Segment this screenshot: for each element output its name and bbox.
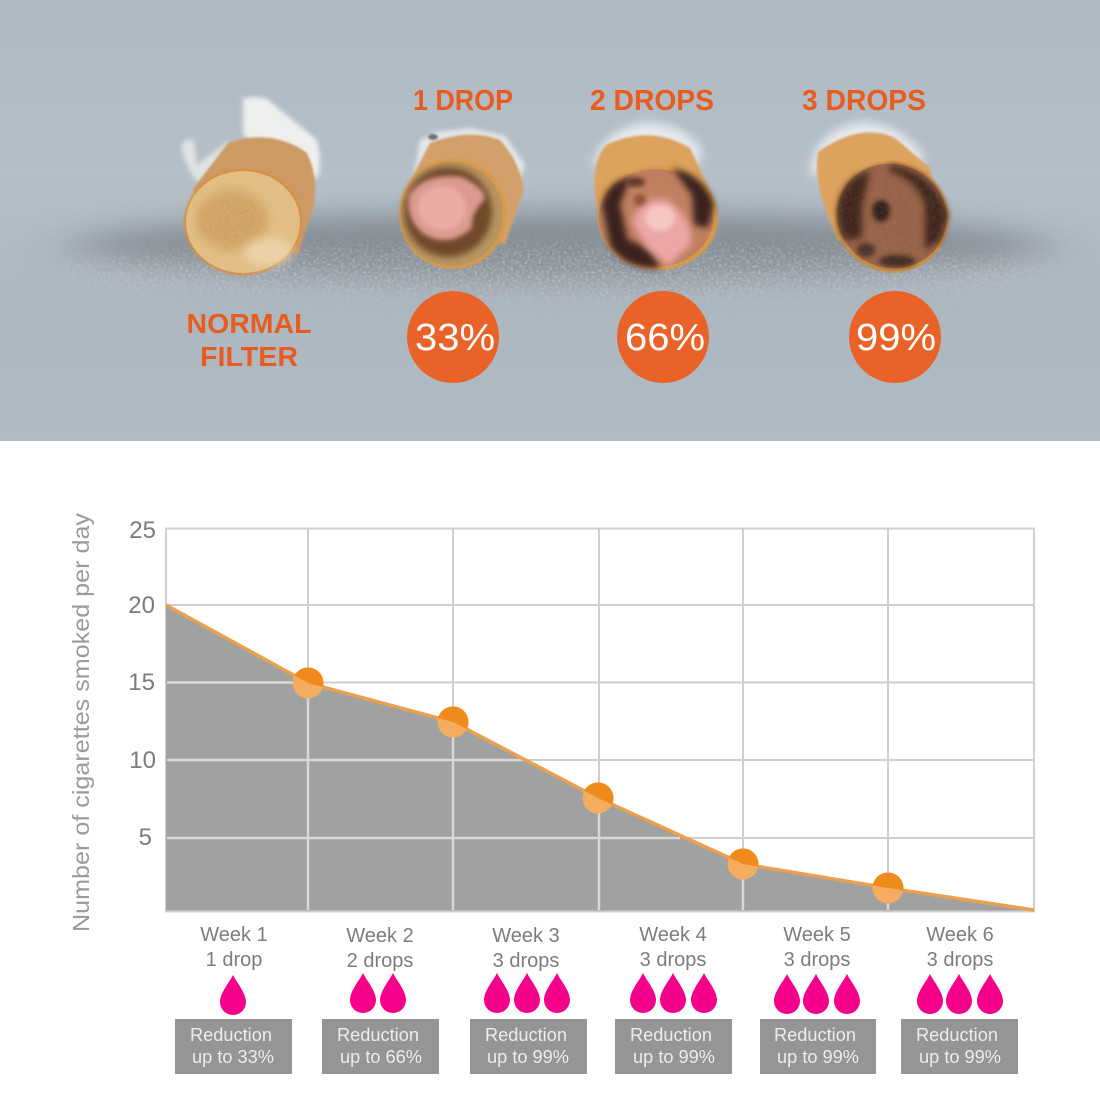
badge: 66%: 66%	[625, 317, 705, 359]
week 2 label: Week 2	[346, 925, 414, 947]
heading: normal filter: NORMAL	[186, 308, 312, 339]
area baseline	[166, 910, 1034, 912]
week 6 reduction box: Reduction	[916, 1025, 998, 1045]
week 6 reduction box: up to 99%	[919, 1047, 1001, 1067]
week 4 reduction box	[615, 1019, 732, 1074]
week 6 column	[901, 924, 1018, 1074]
badge: 99%: 99%	[856, 317, 936, 359]
week 5 label: 3 drops	[784, 949, 850, 971]
week 3 reduction box: up to 99%	[487, 1047, 569, 1067]
week 4 drops	[630, 973, 717, 1013]
y axis tick labels	[128, 517, 156, 851]
week 6 reduction box	[901, 1019, 1018, 1074]
week 6 label: Week 6	[926, 924, 994, 946]
week 4 label: Week 4	[639, 924, 707, 946]
line chart: cigarettes per day	[68, 512, 1034, 932]
week 2 column	[322, 925, 439, 1074]
badge: 33%: 33%	[415, 317, 495, 359]
y axis tick labels: 15	[128, 669, 155, 696]
week 3 reduction box	[470, 1019, 587, 1074]
week 5 reduction box: up to 99%	[777, 1047, 859, 1067]
week 2 reduction box	[322, 1019, 439, 1074]
area under curve	[166, 605, 1034, 912]
week 2 label: 2 drops	[347, 950, 413, 972]
heading: 1 drop: 1 DROP	[413, 85, 513, 117]
week 1 label: Week 1	[200, 924, 268, 946]
ground texture	[78, 236, 1040, 301]
week 3 label: 3 drops	[493, 950, 559, 972]
ground shadow band	[70, 213, 1050, 281]
y axis tick labels: 5	[139, 824, 152, 851]
week 2 drops	[350, 973, 406, 1013]
week 5 drops	[774, 974, 860, 1014]
week 5 label: Week 5	[783, 924, 851, 946]
grid over area	[167, 682, 888, 910]
badge: 99%	[849, 291, 941, 383]
cigarette: three drops	[810, 122, 964, 288]
week 1 drops	[220, 975, 246, 1015]
y axis title: Number of cigarettes smoked per day	[68, 512, 94, 932]
week 1 reduction box: up to 33%	[192, 1047, 274, 1067]
week 1 label: 1 drop	[206, 949, 262, 971]
y axis tick labels: 10	[129, 747, 156, 774]
week 1 reduction box	[175, 1019, 292, 1074]
grid above area	[166, 528, 1034, 912]
cigarette: one drop	[399, 128, 525, 269]
cigarette: two drops	[594, 123, 718, 270]
week 6 label: 3 drops	[927, 949, 993, 971]
heading: 3 drops: 3 DROPS	[802, 85, 926, 117]
panel: filter photo	[0, 0, 1100, 441]
week 2 reduction box: up to 66%	[340, 1047, 422, 1067]
week 5 column	[760, 924, 876, 1074]
week 3 label: Week 3	[492, 925, 560, 947]
week 4 label: 3 drops	[640, 949, 706, 971]
week 4 reduction box: up to 99%	[633, 1047, 715, 1067]
week 4 reduction box: Reduction	[630, 1025, 712, 1045]
week 3 column	[470, 925, 587, 1074]
week 2 reduction box: Reduction	[337, 1025, 419, 1045]
y axis tick labels: 25	[129, 517, 156, 544]
y axis tick labels: 20	[128, 592, 155, 619]
cigarette: normal filter	[181, 97, 320, 275]
week 5 reduction box	[760, 1019, 876, 1074]
week 4 column	[615, 924, 732, 1074]
data points	[292, 668, 904, 904]
week 3 drops	[484, 973, 570, 1013]
week 3 reduction box: Reduction	[485, 1025, 567, 1045]
trend line	[166, 605, 1034, 910]
heading: normal filter: FILTER	[200, 341, 298, 372]
badge: 33%	[407, 291, 499, 383]
heading: 2 drops: 2 DROPS	[590, 85, 714, 117]
photo background	[0, 0, 1100, 441]
badge: 66%	[617, 291, 709, 383]
week 6 drops	[917, 974, 1003, 1014]
week 1 column	[175, 924, 292, 1074]
week 5 reduction box: Reduction	[774, 1025, 856, 1045]
week 1 reduction box: Reduction	[190, 1025, 272, 1045]
